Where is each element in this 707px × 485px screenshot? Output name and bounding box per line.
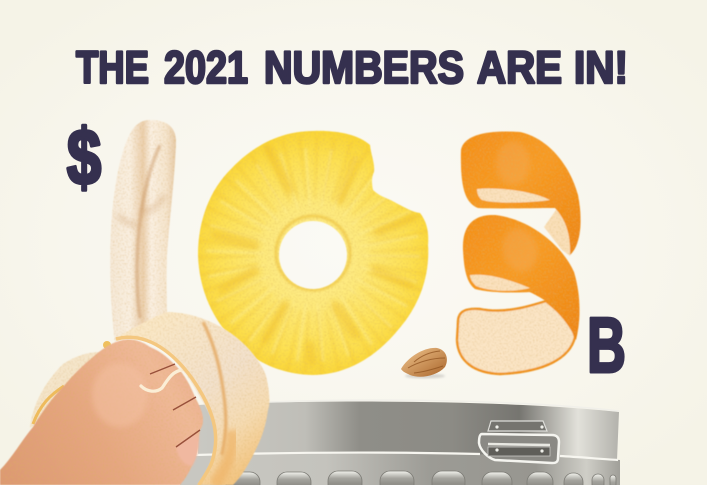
peel upper inner strip <box>477 188 550 203</box>
highlight on middle coil <box>498 224 542 276</box>
title: THE <box>76 42 149 93</box>
peel upper coil <box>461 132 581 255</box>
container lower body <box>180 453 620 485</box>
peel strand on hand <box>141 370 182 391</box>
title <box>76 42 628 93</box>
container latch handle <box>479 421 559 463</box>
orange peel forming the digit 3 <box>457 132 581 374</box>
container lid band <box>198 402 619 460</box>
dollar sign: $ <box>67 114 101 202</box>
metal container <box>180 400 620 485</box>
peeled banana and hand <box>0 120 269 485</box>
hand <box>0 339 203 485</box>
finger creases <box>150 364 200 447</box>
peel middle coil <box>463 215 580 340</box>
back peel left <box>30 352 100 428</box>
back of hand highlight <box>92 363 148 427</box>
lid rim highlight <box>268 400 619 411</box>
peel orange lower shading <box>214 430 232 485</box>
banana fruit <box>110 120 176 342</box>
peel inner fold <box>544 207 574 256</box>
front peel fold line <box>203 322 226 455</box>
pineapple ring <box>198 131 428 375</box>
title: IN! <box>574 42 628 93</box>
banana brown streak <box>137 145 160 318</box>
title: NUMBERS <box>264 42 464 93</box>
back peel yellow inner edge <box>33 386 64 424</box>
peel lower cream face <box>457 301 575 374</box>
banana tan shading <box>118 195 165 225</box>
title: ARE <box>477 42 562 93</box>
title: 2021 <box>164 42 248 93</box>
letter B: B <box>587 301 626 389</box>
peel inner edge <box>116 337 216 485</box>
almond <box>401 348 447 378</box>
front peel <box>113 312 269 485</box>
peel tip <box>103 341 111 349</box>
highlight on upper coil <box>496 141 530 185</box>
band seam highlight <box>195 453 618 460</box>
little finger <box>176 435 199 466</box>
container embossed bumps <box>226 471 616 485</box>
peel middle inner strip <box>470 275 530 291</box>
